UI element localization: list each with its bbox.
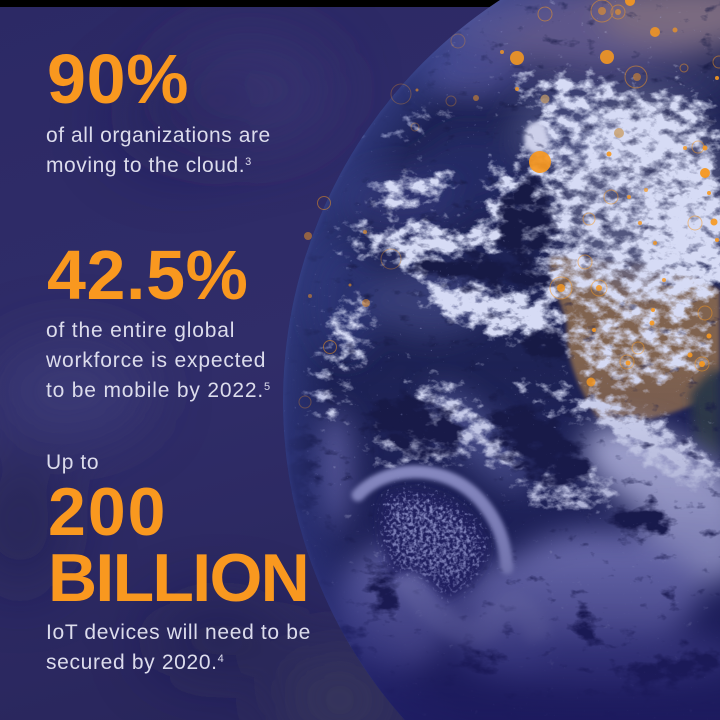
dark cloud gaps [291,180,720,693]
caption: workforce is expected [46,349,266,372]
stat: 90% [46,40,271,177]
caption: of the entire global [46,319,235,342]
storm arc [358,472,507,568]
data points [304,0,719,386]
figure: billion: BILLION [48,540,308,616]
top bar [0,0,503,7]
caption: moving to the cloud.3 [46,154,252,177]
upper atmosphere tint [420,0,720,99]
caption [46,319,271,402]
intro text: Up to [46,451,99,474]
ocean [283,0,720,548]
caption: IoT devices will need to be [46,621,311,644]
caption: to be mobile by 2022.5 [46,379,271,402]
lower swirl [405,575,540,640]
textured clouds [312,73,720,514]
stat: 200 billion [46,451,311,674]
limb glow [283,0,563,720]
background haze [0,30,400,720]
stat: 42.5% [46,236,271,402]
speckled storm centre [380,490,488,600]
caption: secured by 2020.4 [46,651,224,674]
green land east [690,365,720,460]
caption [46,124,271,177]
soft cloud haze [310,90,720,690]
figure: 200: 200 [48,474,167,550]
globe [270,0,720,720]
Africa land [550,256,720,422]
bottom shading [297,389,720,720]
figure: 42.5% [47,236,248,314]
caption [46,621,311,674]
signal rings [299,0,720,408]
solid bright cloud [524,122,548,154]
figure: 90% [47,40,189,118]
caption: of all organizations are [46,124,271,147]
